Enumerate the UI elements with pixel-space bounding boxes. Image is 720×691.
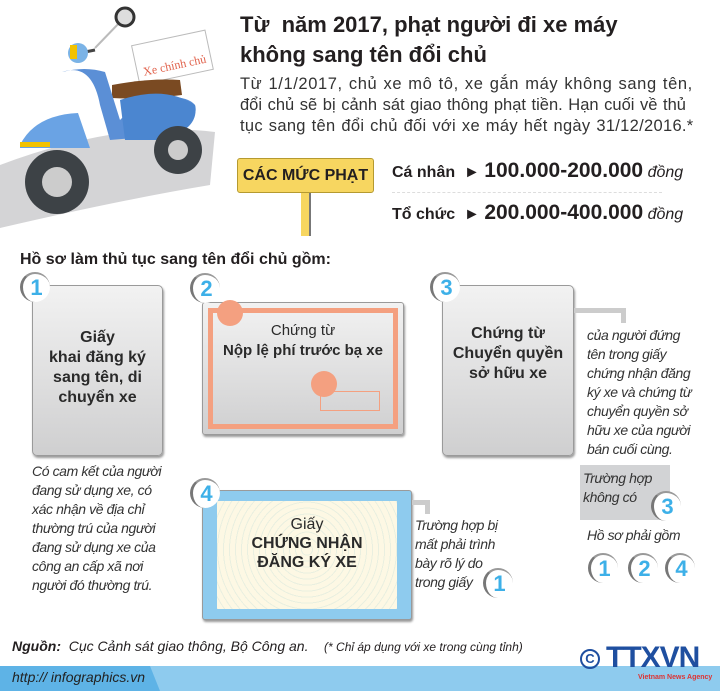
note 3: hữu xe của người bbox=[587, 422, 690, 438]
card 3: sở hữu xe bbox=[469, 365, 547, 382]
card 3: Chuyển quyền bbox=[453, 345, 563, 362]
fine rows: Cá nhân ► 100.000-200.000 đồng bbox=[392, 159, 683, 182]
title bbox=[240, 12, 618, 67]
badge 1 small bbox=[483, 568, 513, 598]
card 2 bbox=[202, 302, 404, 435]
badge 2 bbox=[190, 273, 220, 303]
text hồ sơ phải gồm: Hồ sơ phải gồm bbox=[587, 527, 680, 543]
note 1: xác nhận về địa chỉ bbox=[32, 501, 144, 517]
badges 1 2 4: 2 bbox=[638, 556, 651, 581]
badge 3 bbox=[430, 272, 460, 302]
footer bar bbox=[0, 666, 720, 691]
card 1: sang tên, di bbox=[53, 369, 142, 386]
badge 3 small: 3 bbox=[661, 494, 674, 519]
connector 4 bbox=[412, 500, 430, 514]
note 4: trong giấy bbox=[415, 574, 472, 590]
fine rows bbox=[392, 159, 683, 224]
connector 3 bbox=[574, 308, 626, 323]
note 3: tên trong giấy bbox=[587, 346, 666, 362]
fine rows: Tổ chức ► 200.000-400.000 đồng bbox=[392, 201, 683, 224]
note 3: chứng nhận đăng bbox=[587, 365, 690, 381]
badges 1 2 4: 1 bbox=[598, 556, 611, 581]
badges 1 2 4: 4 bbox=[675, 556, 688, 581]
badge 1: 1 bbox=[30, 275, 43, 300]
note 3: chuyển quyền sở bbox=[587, 403, 688, 419]
note 3 bbox=[587, 327, 692, 457]
title: không sang tên đổi chủ bbox=[240, 42, 487, 67]
source: Nguồn: Cục Cảnh sát giao thông, Bộ Công an. (* Chỉ áp dụng với xe trong cùng tỉnh) bbox=[12, 638, 523, 654]
note 1: đang sử dụng xe, có bbox=[32, 482, 152, 498]
logo TTXVN: TTXVN bbox=[606, 641, 699, 674]
card 1: khai đăng ký bbox=[49, 349, 146, 366]
intro text: đổi chủ sẽ bị cảnh sát giao thông phạt tiền. Hạn cuối về thủ bbox=[240, 96, 686, 114]
intro text: Từ 1/1/2017, chủ xe mô tô, xe gắn máy không sang tên, bbox=[240, 75, 693, 93]
gray box: trường hợp không có: Trường hợp bbox=[583, 470, 652, 486]
card 1: chuyển xe bbox=[58, 389, 137, 406]
card 2: Nộp lệ phí trước bạ xe bbox=[223, 342, 383, 359]
card 1 bbox=[32, 285, 163, 456]
note 1: người đó thường trú. bbox=[32, 577, 152, 593]
illustration: scooter bbox=[0, 6, 215, 228]
intro text bbox=[240, 74, 694, 135]
badge 4 bbox=[190, 478, 220, 508]
illustration: scooter: Xe chính chủ bbox=[142, 52, 207, 79]
note 3: bán cuối cùng. bbox=[587, 441, 672, 457]
note 3: ký xe và chứng từ bbox=[587, 384, 691, 400]
card 4 bbox=[202, 490, 412, 620]
note 1 bbox=[32, 463, 162, 593]
sign: các mức phạt bbox=[237, 158, 374, 236]
card 2: Chứng từ bbox=[271, 322, 335, 339]
note 1: Có cam kết của người bbox=[32, 463, 161, 479]
card 3: Chứng từ bbox=[471, 325, 545, 342]
sign: các mức phạt: CÁC MỨC PHẠT bbox=[243, 167, 368, 184]
note 4 bbox=[415, 517, 498, 590]
section heading: Hồ sơ làm thủ tục sang tên đổi chủ gồm: bbox=[20, 251, 331, 268]
note 4: bày rõ lý do bbox=[415, 555, 483, 571]
title: Từ năm 2017, phạt người đi xe máy bbox=[240, 12, 618, 37]
note 1: đang sử dụng xe của bbox=[32, 539, 155, 555]
note 4: mất phải trình bbox=[415, 536, 495, 552]
intro text: tục sang tên đổi chủ đối với xe máy hết ngày 31/12/2016.* bbox=[240, 117, 694, 135]
logo TTXVN: C bbox=[585, 651, 595, 666]
badge 1 bbox=[20, 272, 50, 302]
card 4: CHỨNG NHẬN bbox=[251, 535, 363, 552]
card 1: Giấy bbox=[80, 329, 115, 346]
badge 3 small bbox=[651, 491, 681, 521]
badge 2: 2 bbox=[200, 276, 213, 301]
note 1: thường trú của người bbox=[32, 520, 155, 536]
note 1: công an cấp xã nơi bbox=[32, 558, 143, 574]
card 4: Giấy bbox=[291, 516, 323, 533]
footer bar: http:// infographics.vn bbox=[12, 669, 145, 685]
badge 4: 4 bbox=[200, 481, 213, 506]
card 4: ĐĂNG KÝ XE bbox=[257, 554, 357, 571]
badge 1 small: 1 bbox=[493, 571, 506, 596]
badges 1 2 4 bbox=[588, 553, 695, 583]
logo TTXVN bbox=[580, 641, 712, 681]
note 4: Trường hợp bị bbox=[415, 517, 498, 533]
gray box: trường hợp không có bbox=[580, 465, 670, 520]
logo TTXVN: Vietnam News Agency bbox=[638, 674, 712, 681]
gray box: trường hợp không có: không có bbox=[583, 489, 637, 505]
card 3 bbox=[442, 285, 574, 456]
badge 3: 3 bbox=[440, 275, 453, 300]
note 3: của người đứng bbox=[587, 327, 680, 343]
